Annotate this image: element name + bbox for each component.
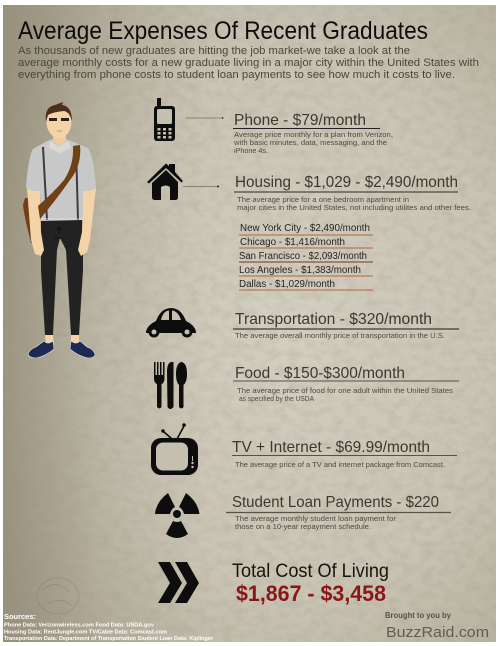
city price list: Los Angeles - $1,383/month [239,265,361,276]
icon: radiation [155,493,200,538]
food description: as specified by the USDA [239,394,314,403]
city price list: New York City - $2,490/month [240,223,370,234]
student loan description [235,514,397,531]
total heading: Total Cost Of Living [232,561,389,582]
icon: double chevron [158,562,199,603]
title: Average Expenses Of Recent Graduates [18,17,428,45]
city price list: Dallas - $1,029/month [239,279,335,290]
sources [4,612,213,642]
bag [23,197,41,243]
intro paragraph [18,45,479,81]
intro paragraph: average monthly costs for a new graduate living in a major city within the United States with [18,57,479,69]
strap [38,145,80,219]
icon: phone [154,98,175,141]
phone description [233,130,393,155]
forearms and hands [27,188,44,256]
neck [53,132,66,146]
icon: television [151,423,198,475]
transportation heading: Transportation - $320/month [235,311,432,328]
housing description: The average price for a one bedroom apartment in [237,195,409,204]
phone heading: Phone - $79/month [234,112,366,129]
belt detail [54,226,62,238]
sources: Transportation Data: Department of Transportation Student Loan Data: Kiplinger [4,636,213,642]
transportation description: The average overall monthly price of transportation in the U.S. [235,331,445,340]
legs [41,218,83,335]
student loan description: The average monthly student loan payment for [235,514,397,523]
TV description: The average price of a TV and internet package from Comcast. [235,460,445,469]
TV heading: TV + Internet - $69.99/month [232,439,430,456]
sources: Sources: [4,612,36,621]
food description: The average price of food for one adult within the United States [237,386,453,395]
food description [237,386,453,403]
intro paragraph: everything from phone costs to student loan payments to see how much it costs to live. [18,69,455,81]
total amount: $1,867 - $3,458 [236,581,386,606]
head [46,106,72,138]
suspenders [43,147,47,220]
phone description: iPhone 4s. [234,146,268,155]
arrow: housing connector [183,186,219,188]
city price list: San Francisco - $2,093/month [239,251,367,262]
arrow: phone connector [186,117,223,119]
phone description: with basic minutes, data, messaging, and the [233,138,387,147]
credit: BuzzRaid.com: BuzzRaid.com [386,624,489,641]
intro paragraph: As thousands of new graduates are hitting the job market-we take a look at the [18,45,410,57]
glasses [49,118,69,121]
shoes [28,341,54,358]
ankles [45,335,79,345]
faint stamp [37,578,79,614]
hair [46,102,72,122]
sources: Housing Data: RentJungle.com TV/Cable Data: Comcast.com [4,630,168,636]
city price list: Chicago - $1,416/month [240,237,345,248]
credit: brought to you by: Brought to you by [385,611,452,620]
icon: house [147,164,183,200]
food heading: Food - $150-$300/month [235,365,405,382]
student loan heading: Student Loan Payments - $220 [232,494,439,511]
city price list [239,223,373,290]
housing description [237,195,471,212]
icon: car [146,308,196,338]
student loan description: those on a 10-year repayment schedule. [235,522,371,531]
phone description: Average price monthly for a plan from Verizon, [234,130,393,139]
shirt [26,137,96,221]
illustration: graduate figure [23,102,96,358]
icon: cutlery [154,362,187,409]
sources: Phone Data: Verizonwireless.com Food Data: USDA.gov [4,622,154,628]
housing description: major cities in the United States, not including utilites and other fees. [237,203,471,212]
housing heading: Housing - $1,029 - $2,490/month [235,174,458,191]
